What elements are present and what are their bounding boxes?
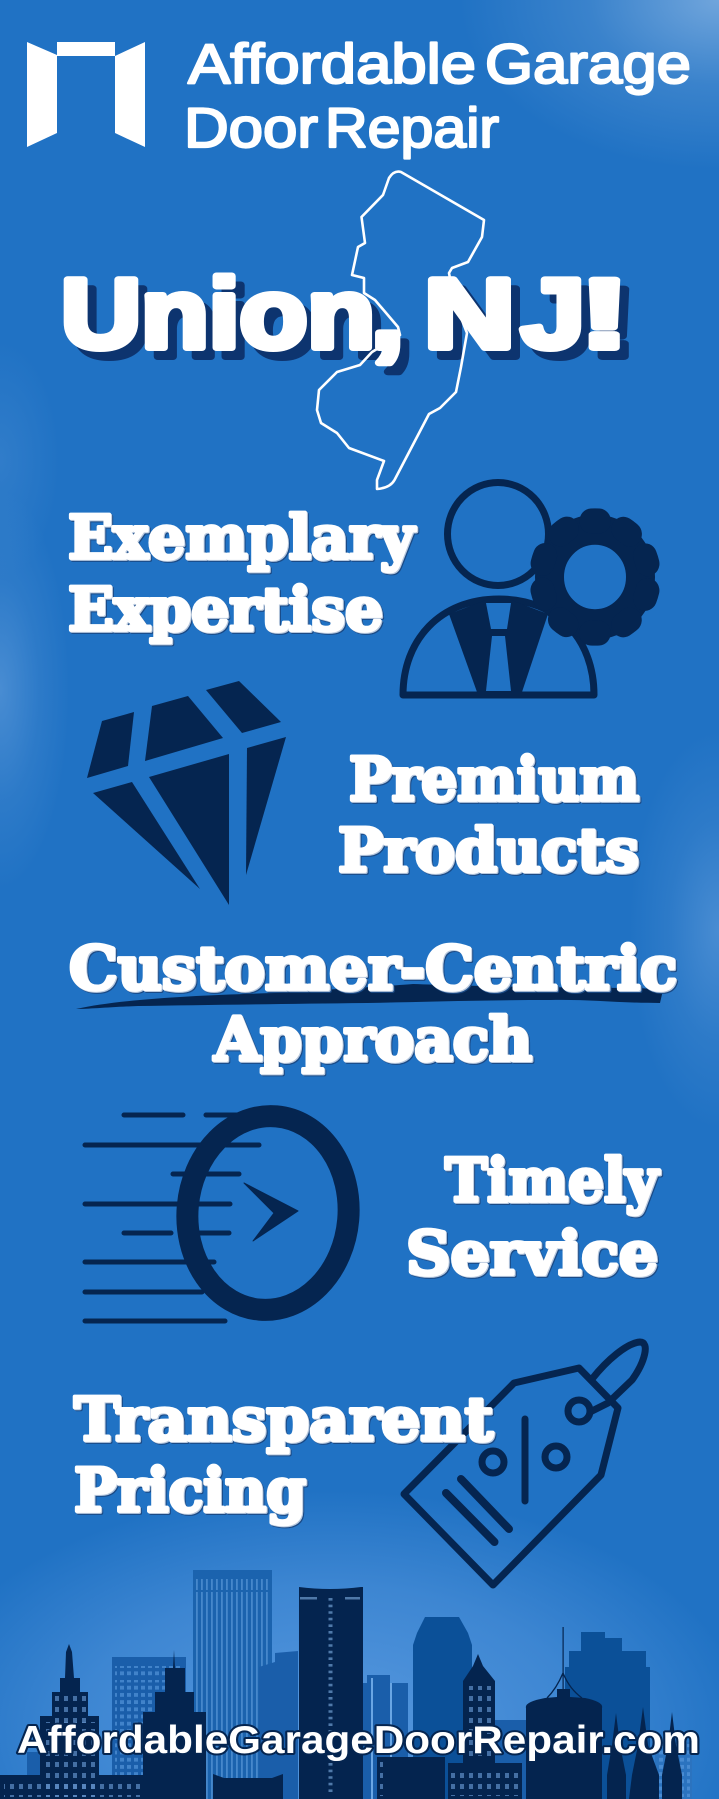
city skyline <box>0 1570 692 1799</box>
front buildings <box>0 1587 682 1799</box>
brush underline <box>76 984 663 1009</box>
icon: price tag <box>404 1342 645 1585</box>
title: Union, NJ!: N <box>424 258 515 368</box>
heading: Premium Products <box>338 745 639 886</box>
heading: Customer-Centric Approach: Approach <box>213 1005 532 1075</box>
heading: Exemplary Expertise: Expertise <box>68 575 383 645</box>
title: Union, NJ! <box>61 258 629 368</box>
title: Union, NJ!: , <box>371 258 404 368</box>
title: Union, NJ!: Union <box>61 258 375 368</box>
heading: Transparent Pricing: Pricing <box>74 1456 306 1526</box>
heading: Transparent Pricing <box>74 1385 493 1526</box>
building windows <box>4 1597 520 1797</box>
heading: Timely Service: Service <box>406 1219 658 1289</box>
website URL: AffordableGarageDoorRepair.com <box>17 1719 700 1762</box>
heading: Exemplary Expertise <box>68 503 416 645</box>
logo wordmark: Repair <box>325 96 499 159</box>
logo: garage door mark <box>27 42 145 147</box>
heading: Exemplary Expertise: Exemplary <box>68 503 416 573</box>
heading: Timely Service <box>406 1146 660 1289</box>
icon: fast clock <box>85 1109 357 1321</box>
heading: Timely Service: Timely <box>445 1146 660 1216</box>
heading: Customer-Centric Approach <box>69 934 677 1075</box>
back buildings <box>27 1570 692 1799</box>
icon: diamond <box>87 681 286 905</box>
icon: person with gear <box>403 482 649 695</box>
title: Union, NJ!: J <box>521 258 585 368</box>
heading: Premium Products: Premium <box>349 745 639 815</box>
title: Union, NJ!: ! <box>580 258 629 368</box>
logo wordmark: Garage <box>485 32 691 95</box>
logo wordmark: Affordable <box>188 32 476 95</box>
logo wordmark <box>184 32 691 159</box>
New Jersey outline map <box>317 172 484 489</box>
logo wordmark: Door <box>184 96 318 159</box>
heading: Transparent Pricing: Transparent <box>74 1385 493 1455</box>
heading: Customer-Centric Approach: Customer-Centric <box>69 934 677 1004</box>
heading: Premium Products: Products <box>338 816 639 886</box>
